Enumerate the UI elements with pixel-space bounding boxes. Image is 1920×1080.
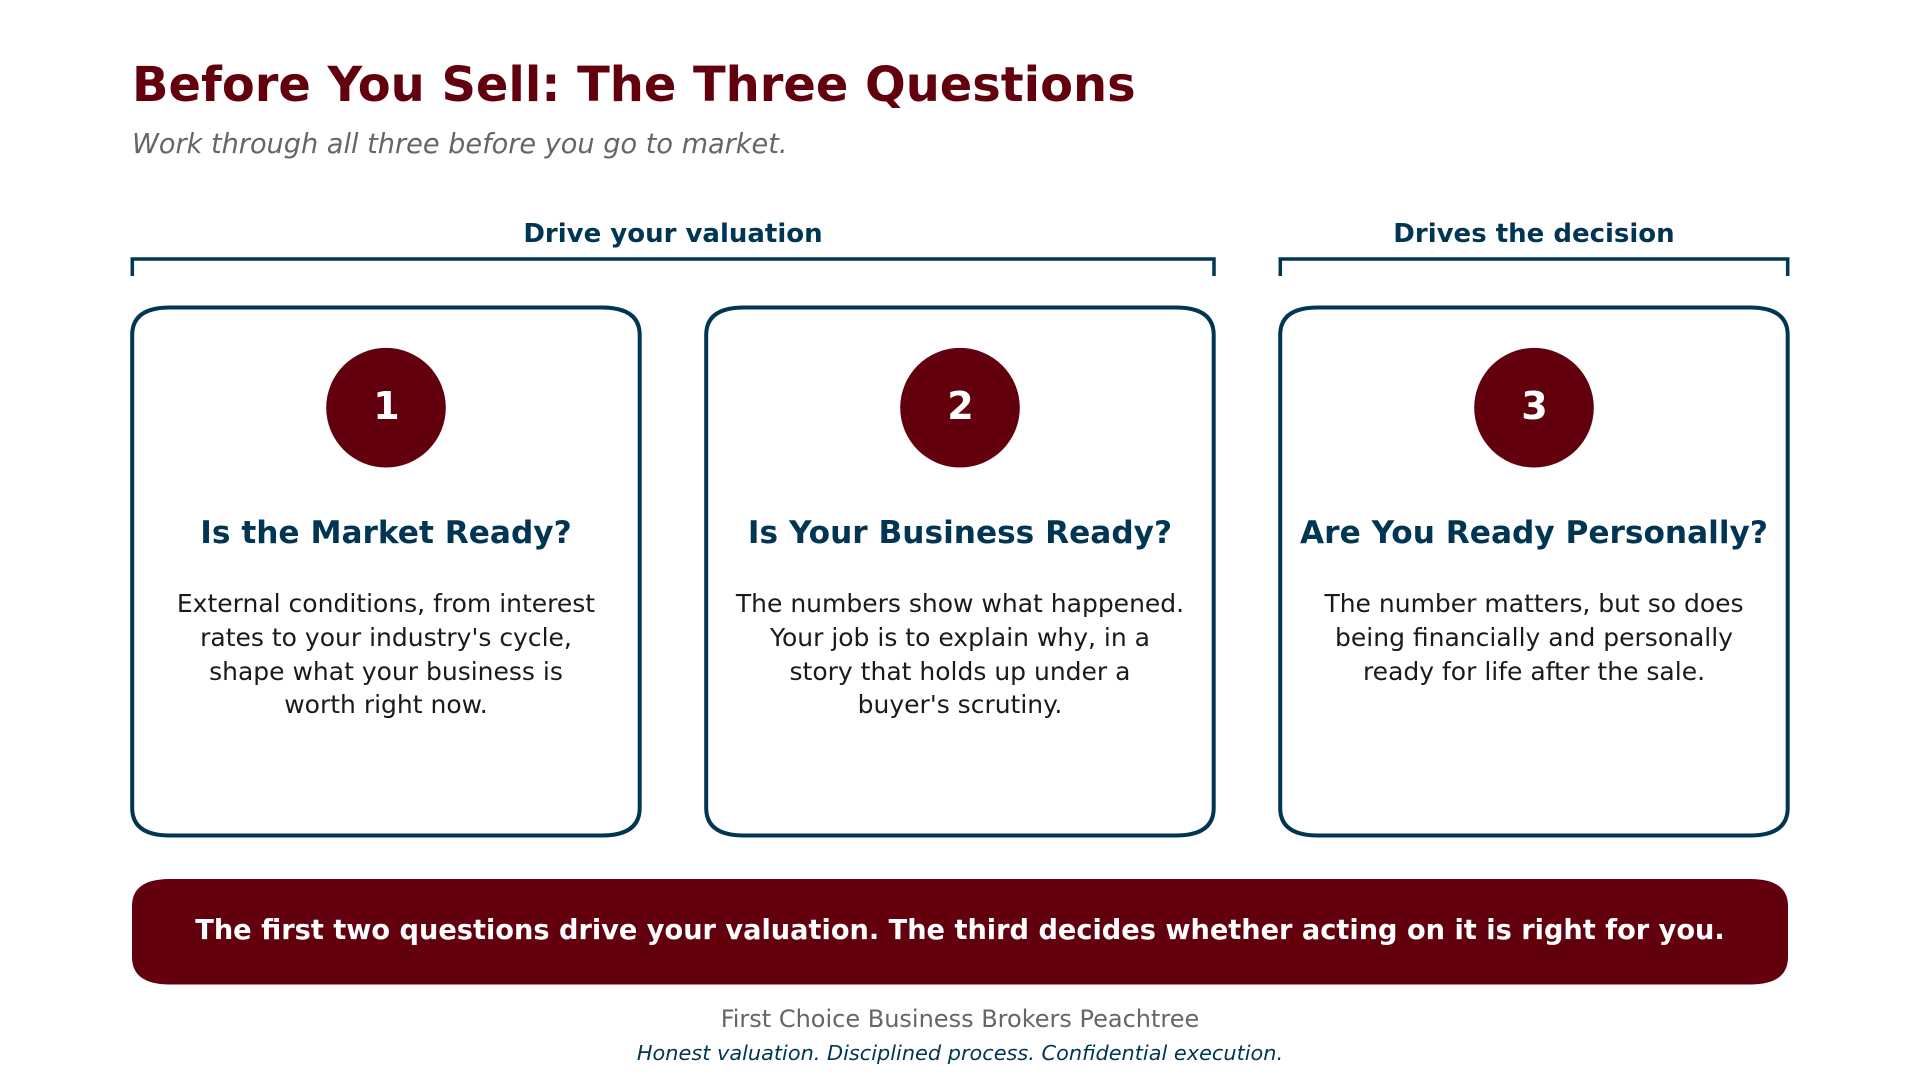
heading: question 1: Is the Market Ready? — [200, 515, 572, 551]
text: question 1 body: External conditions, from interest — [177, 589, 595, 618]
icon: number 3: 3 — [1521, 384, 1548, 428]
bracket: drives the decision: Drives the decision — [1393, 219, 1675, 249]
panel: question 3 — [1280, 308, 1788, 836]
panel: question 2 — [706, 308, 1214, 836]
text: question 1 body — [177, 589, 595, 719]
text: question 2 body: Your job is to explain why, in a — [769, 623, 1150, 652]
text: question 2 body — [735, 589, 1184, 719]
icon: number 2 — [900, 348, 1020, 468]
text: question 2 body: The numbers show what happened. — [735, 589, 1184, 618]
bracket: drive your valuation — [132, 219, 1214, 276]
banner: takeaway — [132, 879, 1788, 984]
text: question 3 body: being financially and personally — [1335, 623, 1733, 652]
text: question 1 body: rates to your industry's cycle, — [200, 623, 572, 652]
icon: number 1 — [326, 348, 446, 468]
text: question 2 body: story that holds up under a — [790, 657, 1130, 686]
footer: tagline: Honest valuation. Disciplined process. Confidential execution. — [637, 1041, 1283, 1065]
text: question 3 body: The number matters, but so does — [1323, 589, 1744, 618]
text: question 3 body: ready for life after the sale. — [1363, 657, 1705, 686]
icon: number 3 — [1474, 348, 1594, 468]
bracket: drives the decision — [1280, 219, 1788, 276]
icon: number 2: 2 — [947, 384, 974, 428]
bracket: drive your valuation: Drive your valuation — [523, 219, 823, 249]
heading: question 2: Is Your Business Ready? — [748, 515, 1172, 551]
title: Before You Sell: The Three Questions — [132, 58, 1136, 113]
text: question 3 body — [1323, 589, 1744, 686]
text: question 1 body: worth right now. — [284, 690, 488, 719]
text: question 2 body: buyer's scrutiny. — [858, 690, 1062, 719]
icon: number 1: 1 — [373, 384, 400, 428]
subtitle: Work through all three before you go to market. — [132, 129, 787, 160]
text: question 1 body: shape what your business is — [209, 657, 563, 686]
panel: question 1 — [132, 308, 640, 836]
heading: question 3: Are You Ready Personally? — [1300, 515, 1768, 551]
banner: takeaway: The first two questions drive your valuation. The third decides whether acting on it is right for you. — [195, 915, 1725, 946]
footer: company name: First Choice Business Brokers Peachtree — [721, 1005, 1199, 1033]
